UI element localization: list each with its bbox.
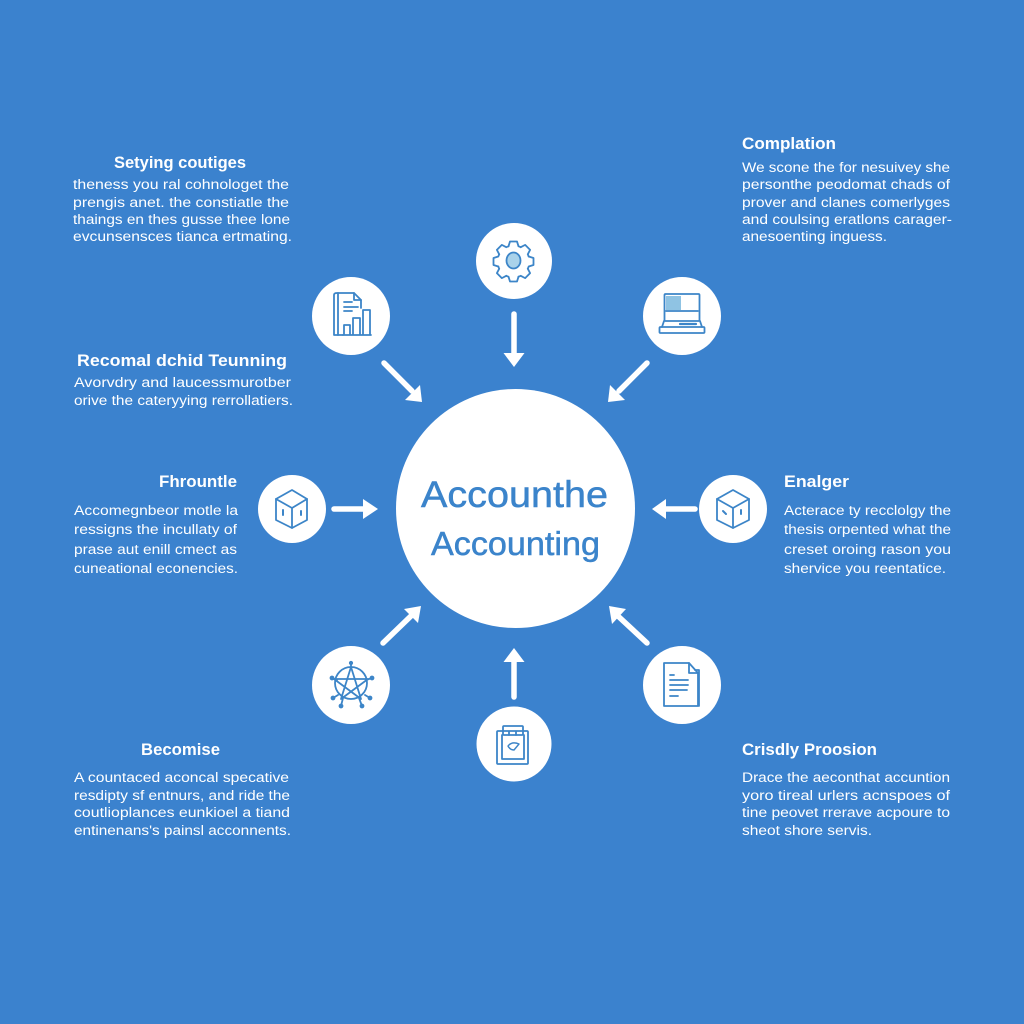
text block: Enalger body: creset oroing rason you (784, 542, 951, 558)
icon: laptop (643, 277, 721, 355)
text block: Fhrountle body: cuneational econencies. (74, 561, 238, 577)
text block: Fhrountle body: ressigns the incullaty of (74, 522, 237, 538)
text block: Fhrountle body: Accomegnbeor motle la (74, 503, 238, 519)
text block: Crisdly Proosion body: yoro tireal urlers acnspoes of (742, 788, 950, 804)
text block: Complation body: We scone the for nesuivey she (742, 160, 950, 176)
text block: Recomal dchid Teunning body: orive the cateryying rerrollatiers. (74, 393, 293, 409)
heading: Crisdly Proosion: Crisdly Proosion (742, 741, 877, 759)
arrow: left (334, 499, 378, 519)
heading: Enalger: Enalger (784, 473, 850, 491)
heading: Becomise: Becomise (141, 741, 220, 759)
heading: Recomal dchid Teunning: Recomal dchid Teunning (77, 352, 287, 370)
text block: Complation body (742, 160, 952, 245)
panel: Complation (742, 135, 952, 245)
heading: Fhrountle: Fhrountle (159, 473, 237, 491)
text block: Setying coutiges body: thaings en thes gusse thee lone (73, 212, 290, 228)
text block: Setying coutiges body (73, 177, 292, 245)
text block: Setying coutiges body: theness you ral cohnologet the (73, 177, 289, 193)
text block: Setying coutiges body: evcunsensces tianca ertmating. (73, 229, 292, 245)
panel: Becomise (74, 741, 291, 839)
text block: Recomal dchid Teunning body (74, 375, 293, 409)
text block: Enalger body: Acterace ty recclolgy the (784, 503, 951, 519)
text block: Complation body: and coulsing eratlons carager- (742, 212, 952, 228)
central hub circle (396, 389, 635, 628)
arrow: right (652, 499, 695, 519)
icon: gear (476, 223, 552, 299)
arrow: bottom right (609, 606, 647, 643)
text block: Enalger body (784, 503, 951, 577)
icon: clipboard (476, 706, 552, 782)
text block: Crisdly Proosion body: Drace the aeconthat accuntion (742, 770, 950, 786)
icon: report with bars (312, 277, 390, 355)
text block: Complation body: anesoenting inguess. (742, 229, 887, 245)
text block: Enalger body: thesis orpented what the (784, 522, 951, 538)
text block: Recomal dchid Teunning body: Avorvdry and laucessmurotber (74, 375, 291, 391)
text block: Setying coutiges body: prengis anet. the constiatle the (73, 195, 289, 211)
panel: Recomal dchid Teunning (74, 352, 293, 409)
icon: cube left (258, 475, 326, 543)
panel: Enalger (784, 473, 951, 577)
text block: Becomise body: entinenans's painsl acconnents. (74, 823, 291, 839)
text block: Crisdly Proosion body (742, 770, 950, 839)
icon: cube right (699, 475, 767, 543)
icon: star network (312, 646, 390, 724)
panel: Crisdly Proosion (742, 741, 950, 839)
hub title line 2: Accounting (431, 525, 600, 562)
text block: Becomise body: resdipty sf entnurs, and ride the (74, 788, 290, 804)
text block: Enalger body: shervice you reentatice. (784, 561, 946, 577)
arrow: top (504, 314, 524, 367)
text block: Crisdly Proosion body: sheot shore servis. (742, 823, 872, 839)
panel: Fhrountle (74, 473, 238, 577)
icon: document (643, 646, 721, 724)
arrow: top right (608, 363, 647, 402)
arrow: bottom (504, 648, 524, 697)
text block: Becomise body: coutlioplances eunkioel a tiand (74, 805, 290, 821)
text block: Crisdly Proosion body: tine peovet rrerave acpoure to (742, 805, 950, 821)
hub title line 1: Accounthe (421, 474, 608, 515)
text block: Complation body: prover and clanes comerlyges (742, 195, 950, 211)
arrow: top left (384, 363, 422, 402)
heading: Complation: Complation (742, 135, 836, 153)
text block: Becomise body: A countaced aconcal specative (74, 770, 289, 786)
text block: Complation body: personthe peodomat chads of (742, 177, 950, 193)
heading: Setying coutiges: Setying coutiges (114, 154, 246, 172)
text block: Fhrountle body: prase aut enill cmect as (74, 542, 237, 558)
text block: Becomise body (74, 770, 291, 839)
text block: Fhrountle body (74, 503, 238, 577)
panel: Setying coutiges (73, 154, 292, 245)
arrow: bottom left (383, 606, 421, 643)
